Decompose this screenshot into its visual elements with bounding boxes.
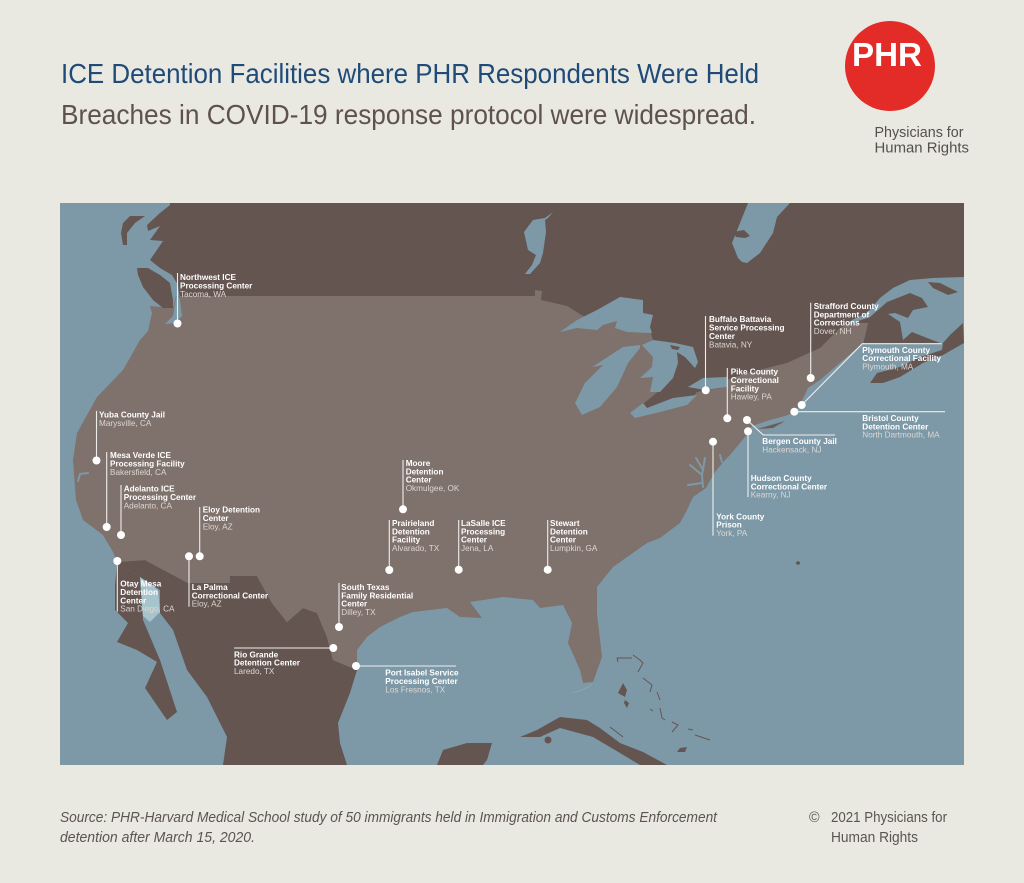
- label: Strafford County: Strafford County: [814, 302, 879, 311]
- label: Buffalo Batavia: Service Processing: [709, 324, 785, 332]
- San Francisco Bay: [78, 473, 88, 481]
- Vancouver Island: [137, 268, 173, 308]
- label: Mesa Verde: Bakersfield, CA: [110, 468, 167, 477]
- source note: Source: PHR-Harvard Medical School study of 50 immigrants held in Immigration and Customs Enforcement: [60, 810, 718, 826]
- label: Hudson County: Kearny, NJ: [751, 491, 791, 500]
- label: Northwest ICE Processing Center: [174, 273, 253, 328]
- label: Strafford County: Corrections: [814, 319, 860, 328]
- Gaspe and New Brunswick: [841, 293, 943, 344]
- Lake Winnipeg: [524, 212, 553, 274]
- label: Otay Mesa: Otay Mesa: [120, 580, 162, 589]
- label: Hudson County: Correctional Center: [751, 482, 828, 491]
- label: Moore: Moore: [406, 459, 431, 468]
- label: Plymouth County: Plymouth, MA: [862, 362, 914, 372]
- label: Eloy: Eloy, AZ: [203, 522, 233, 532]
- label: LaSalle: LaSalle ICE: [461, 519, 506, 528]
- label: Yuba County Jail: [92, 410, 165, 464]
- label: Hudson County: Hudson County: [751, 474, 812, 483]
- label: Mesa Verde: Processing Facility: [110, 460, 185, 468]
- map of North America: [60, 203, 964, 765]
- label: La Palma: Correctional Center: [192, 591, 269, 600]
- label: La Palma: La Palma: [192, 583, 228, 592]
- label: Pike County: Correctional: [731, 376, 779, 385]
- label: Prairieland: Facility: [392, 536, 421, 545]
- Puget Sound: [165, 293, 182, 324]
- label: Stewart: [544, 519, 598, 574]
- label: Prairieland: Alvarado, TX: [392, 544, 440, 553]
- label: Bristol County: Bristol County: [862, 414, 919, 423]
- label: Rio Grande: [234, 644, 337, 676]
- label: Stewart: Lumpkin, GA: [550, 544, 598, 553]
- Isle of Youth: [544, 736, 552, 744]
- label: South Texas: South Texas: [341, 583, 390, 592]
- Bermuda: [796, 561, 800, 565]
- label: Adelanto: Processing Center: [124, 493, 197, 502]
- label: Prairieland: Prairieland: [392, 519, 434, 528]
- Mexico: [117, 560, 357, 765]
- label: Pike County: Facility: [731, 384, 759, 393]
- label: Strafford County: Dover, NH: [814, 327, 852, 336]
- label: Buffalo Batavia: [702, 315, 785, 394]
- United States: [73, 290, 868, 683]
- label: Adelanto: Adelanto, CA: [124, 502, 172, 510]
- label: Yuba County Jail: Yuba County Jail: [99, 410, 165, 420]
- copyright: ©: [809, 810, 820, 826]
- label: Eloy: Eloy Detention: [203, 506, 260, 515]
- Nova Scotia and Cape Breton: [870, 323, 964, 383]
- label: La Palma: Eloy, AZ: [192, 600, 222, 609]
- label: Pike County: Pike County: [731, 368, 778, 377]
- label: Plymouth County: Plymouth County: [862, 346, 931, 355]
- label: Prairieland: [385, 519, 440, 574]
- Lake Michigan: [575, 345, 640, 415]
- label: Strafford County: Department of: [814, 310, 869, 319]
- copyright: Human Rights: [831, 830, 918, 846]
- source note: detention after March 15, 2020.: [60, 830, 255, 846]
- label: Buffalo Batavia: Center: [709, 332, 736, 341]
- copyright: [809, 810, 947, 846]
- label: Plymouth County: Correctional Facility: [862, 354, 941, 363]
- Anticosti: [928, 282, 958, 295]
- label: South Texas: Dilley, TX: [341, 608, 376, 617]
- label: Bristol County: [790, 408, 945, 440]
- label: South Texas: Center: [341, 600, 368, 609]
- label: Mesa Verde: Mesa Verde ICE: [110, 451, 172, 460]
- label: Stewart: Center: [550, 536, 577, 545]
- label: Northwest ICE Processing Center: Tacoma, WA: [180, 290, 227, 299]
- label: Bristol County: Detention Center: [862, 422, 929, 431]
- islands in North Channel: [670, 345, 680, 350]
- Long Island: [757, 421, 785, 429]
- label: Pike County: Hawley, PA: [731, 393, 772, 402]
- Andros: [618, 683, 629, 708]
- label: Otay Mesa: [113, 557, 175, 614]
- label: La Palma: [185, 552, 269, 609]
- label: Otay Mesa: San Diego, CA: [120, 605, 175, 614]
- Yucatan: [437, 743, 492, 765]
- label: Yuba County Jail: Marysville, CA: [99, 419, 152, 428]
- label: Strafford County: [807, 302, 879, 382]
- label: Bergen County: [743, 416, 837, 454]
- label: Pike County: [723, 368, 779, 422]
- label: Stewart: Stewart: [550, 519, 580, 528]
- logo: PHR: [845, 21, 969, 156]
- label: Moore: Okmulgee, OK: [406, 484, 460, 493]
- Haida Gwaii: [121, 216, 145, 245]
- label: LaSalle: [455, 519, 506, 574]
- label: Prairieland: Detention: [392, 527, 430, 536]
- Lake Superior: [560, 297, 653, 333]
- label: Port Isabel: Los Fresnos, TX: [385, 685, 446, 694]
- Bahamas: [610, 655, 710, 740]
- Canada: [147, 203, 964, 425]
- Florida Keys: [572, 685, 592, 693]
- label: Rio Grande: Laredo, TX: [234, 667, 275, 676]
- label: Eloy: [196, 506, 260, 560]
- label: York County: [709, 438, 765, 538]
- label: Moore: [399, 459, 460, 513]
- Cuba: [520, 717, 667, 765]
- Lake Erie: [630, 395, 697, 418]
- Hispaniola: [677, 747, 687, 752]
- Lake Huron and Georgian Bay: [640, 340, 698, 392]
- Hudson and James Bay: [732, 203, 790, 263]
- label: Hudson County: [744, 427, 828, 500]
- label: LaSalle: Jena, LA: [461, 544, 494, 553]
- label: Buffalo Batavia: Batavia, NY: [709, 340, 753, 349]
- Chesapeake and Delaware bays: [688, 455, 722, 487]
- source note: [60, 810, 718, 846]
- label: Rio Grande: Detention Center: [234, 659, 301, 668]
- label: Moore: Detention: [406, 467, 443, 476]
- label: Otay Mesa: Detention: [120, 588, 158, 597]
- Baja California: [115, 562, 177, 720]
- title: ICE Detention Facilities where PHR Respondents Were Held: [61, 58, 759, 89]
- label: Northwest ICE Processing Center: Northwest ICE: [180, 273, 236, 282]
- label: Port Isabel: Processing Center: [385, 677, 458, 686]
- label: Adelanto: Adelanto ICE: [124, 485, 175, 494]
- label: Otay Mesa: Center: [120, 596, 147, 605]
- label: Port Isabel: Port Isabel Service: [385, 669, 459, 678]
- label: Mesa Verde: [103, 451, 185, 531]
- Lake Ontario: [688, 377, 727, 390]
- label: Eloy: Center: [203, 514, 229, 523]
- island in James Bay: [733, 230, 750, 238]
- label: Rio Grande: Rio Grande: [234, 650, 279, 659]
- label: Plymouth County: [798, 344, 942, 409]
- label: Adelanto: [117, 485, 197, 539]
- label: LaSalle: Processing: [461, 527, 505, 536]
- label: LaSalle: Center: [461, 536, 488, 545]
- label: Buffalo Batavia: Buffalo Battavia: [709, 315, 772, 324]
- label: South Texas: Family Residential: [341, 591, 413, 600]
- label: Stewart: Detention: [550, 527, 588, 536]
- label: York County: York County: [716, 512, 765, 521]
- label: Northwest ICE Processing Center: Processing Center: [180, 282, 253, 290]
- subtitle: Breaches in COVID-19 response protocol were widespread.: [61, 99, 756, 130]
- Gulf of California highlight: [140, 577, 160, 622]
- label: South Texas: [335, 583, 413, 631]
- label: York County: Prison: [716, 521, 742, 530]
- logo: PHR: Physicians for: [874, 125, 964, 141]
- copyright: 2021 Physicians for: [831, 810, 947, 826]
- logo: PHR: Human Rights: [874, 140, 969, 156]
- label: Moore: Center: [406, 476, 432, 485]
- label: York County: York, PA: [716, 529, 748, 538]
- label: Bergen County: Hackensack, NJ: [762, 445, 821, 454]
- logo: PHR: PHR: [852, 36, 922, 73]
- label: Bergen County: Bergen County Jail: [762, 437, 837, 446]
- label: Port Isabel: [352, 662, 459, 694]
- label: Bristol County: North Dartmouth, MA: [862, 430, 940, 440]
